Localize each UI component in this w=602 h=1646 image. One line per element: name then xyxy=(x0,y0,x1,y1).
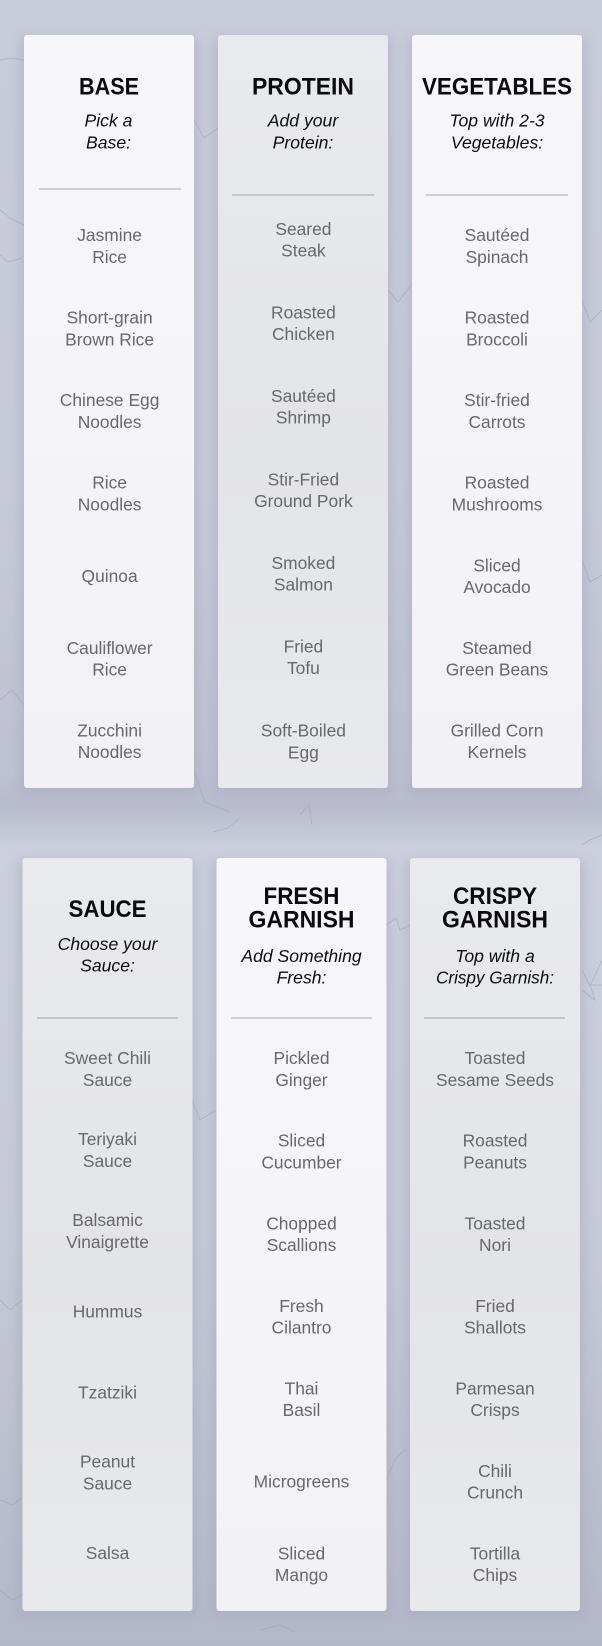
list: crispy garnish options: Peanuts xyxy=(463,1152,527,1172)
list: vegetable options: Sliced xyxy=(473,555,521,575)
list: crispy garnish options: Sesame Seeds xyxy=(436,1070,554,1090)
subtitle: add something fresh: Fresh: xyxy=(277,968,327,988)
list: base options: Rice xyxy=(92,660,127,680)
list: vegetable options: Broccoli xyxy=(466,329,528,349)
list: crispy garnish options: Crisps xyxy=(470,1400,520,1420)
subtitle: add something fresh xyxy=(240,946,362,988)
list: fresh garnish options: Pickled xyxy=(273,1048,330,1068)
list: base options: Noodles xyxy=(78,742,142,762)
panel: sauce xyxy=(22,858,192,1611)
list: protein options: Seared xyxy=(275,219,331,239)
list: base options: Chinese Egg xyxy=(60,390,159,410)
list: crispy garnish options: Shallots xyxy=(464,1317,526,1337)
list: sauce options: Vinaigrette xyxy=(66,1232,149,1252)
list: fresh garnish options: Cilantro xyxy=(272,1317,331,1337)
heading: fresh garnish: GARNISH xyxy=(248,907,354,934)
list: base options: Zucchini xyxy=(77,720,142,740)
subtitle: add your protein xyxy=(267,111,339,152)
list: vegetable options: Steamed xyxy=(462,638,532,658)
list: protein options: Steak xyxy=(281,241,326,261)
list: vegetable options: Green Beans xyxy=(446,660,549,680)
list: sauce options: Sweet Chili xyxy=(64,1048,151,1068)
list: crispy garnish options: Parmesan xyxy=(455,1378,535,1398)
list: protein options: Soft-Boiled xyxy=(261,721,346,741)
list: protein options xyxy=(254,219,353,762)
panel: vegetables xyxy=(412,35,582,788)
list: base options: Noodles xyxy=(78,494,142,514)
list: protein options: Shrimp xyxy=(276,408,331,428)
list: vegetable options: Mushrooms xyxy=(452,494,543,514)
panel: fresh garnish xyxy=(216,858,386,1611)
list: fresh garnish options: Chopped xyxy=(266,1213,337,1233)
list: sauce options: Hummus xyxy=(73,1301,143,1321)
list: crispy garnish options: Toasted xyxy=(465,1213,525,1233)
list: sauce options: Tzatziki xyxy=(78,1382,137,1402)
subtitle: pick a base xyxy=(85,111,133,152)
list: protein options: Smoked xyxy=(272,553,335,573)
subtitle: add something fresh: Add Something xyxy=(240,946,362,966)
list: vegetable options: Sautéed xyxy=(465,225,529,245)
list: base options: Cauliflower xyxy=(67,638,153,658)
list: fresh garnish options: Sliced xyxy=(278,1131,325,1151)
panel: protein xyxy=(218,35,388,788)
list: protein options: Tofu xyxy=(287,658,320,678)
list: crispy garnish options: Tortilla xyxy=(470,1543,520,1563)
list: fresh garnish options: Sliced xyxy=(278,1543,325,1563)
subtitle: top with vegetables: Vegetables: xyxy=(451,132,543,152)
subtitle: top with crispy garnish: Top with a xyxy=(455,946,535,966)
subtitle: pick a base: Base: xyxy=(86,132,131,152)
list: vegetable options: Kernels xyxy=(468,742,527,762)
list: vegetable options: Carrots xyxy=(468,412,526,432)
list: sauce options: Balsamic xyxy=(72,1210,143,1230)
list: protein options: Chicken xyxy=(272,324,335,344)
list: protein options: Egg xyxy=(288,742,319,762)
list: protein options: Fried xyxy=(284,637,323,657)
list: fresh garnish options: Mango xyxy=(275,1565,328,1585)
list: sauce options: Sauce xyxy=(83,1473,132,1493)
subtitle: choose your sauce: Sauce: xyxy=(80,956,135,976)
list: crispy garnish options: Toasted xyxy=(465,1048,525,1068)
list: protein options: Roasted xyxy=(271,302,336,322)
heading: sauce: SAUCE xyxy=(68,896,146,923)
heading: crispy garnish: CRISPY xyxy=(453,883,537,910)
list: fresh garnish options xyxy=(254,1048,350,1585)
heading: fresh garnish xyxy=(248,883,354,934)
list: vegetable options: Spinach xyxy=(466,247,528,267)
list: fresh garnish options: Thai xyxy=(285,1378,318,1398)
list: fresh garnish options: Basil xyxy=(283,1400,320,1420)
list: sauce options: Teriyaki xyxy=(78,1129,137,1149)
list: fresh garnish options: Fresh xyxy=(279,1296,324,1316)
list: crispy garnish options xyxy=(436,1048,554,1585)
list: base options: Jasmine xyxy=(77,225,142,245)
heading: protein: PROTEIN xyxy=(252,74,354,100)
subtitle: top with vegetables xyxy=(449,111,545,152)
list: crispy garnish options: Roasted xyxy=(463,1131,527,1151)
list: vegetable options: Roasted xyxy=(465,473,529,493)
heading: vegetables: VEGETABLES xyxy=(422,74,572,100)
subtitle: top with crispy garnish xyxy=(436,946,554,988)
heading: fresh garnish: FRESH xyxy=(264,883,340,910)
subtitle: choose your sauce: Choose your xyxy=(58,934,159,954)
list: sauce options: Peanut xyxy=(80,1452,135,1472)
list: crispy garnish options: Crunch xyxy=(467,1483,523,1503)
subtitle: pick a base: Pick a xyxy=(85,111,133,131)
list: base options xyxy=(60,225,159,762)
heading: crispy garnish: GARNISH xyxy=(442,907,548,934)
list: crispy garnish options: Chips xyxy=(473,1565,518,1585)
list: vegetable options: Grilled Corn xyxy=(451,720,543,740)
list: fresh garnish options: Cucumber xyxy=(261,1152,342,1172)
list: sauce options: Sauce xyxy=(83,1151,132,1171)
list: crispy garnish options: Nori xyxy=(479,1235,511,1255)
list: crispy garnish options: Chili xyxy=(478,1461,512,1481)
list: base options: Noodles xyxy=(78,412,142,432)
heading: base: BASE xyxy=(79,74,139,100)
subtitle: add your protein: Protein: xyxy=(273,132,333,152)
list: crispy garnish options: Fried xyxy=(475,1296,515,1316)
list: sauce options: Salsa xyxy=(86,1543,130,1563)
list: protein options: Stir-Fried xyxy=(268,469,339,489)
panel: crispy garnish xyxy=(410,858,580,1611)
list: base options: Quinoa xyxy=(82,566,138,586)
subtitle: add your protein: Add your xyxy=(267,111,339,131)
list: base options: Short-grain xyxy=(67,308,153,328)
heading: crispy garnish xyxy=(442,883,548,934)
subtitle: top with crispy garnish: Crispy Garnish: xyxy=(436,968,554,988)
list: fresh garnish options: Scallions xyxy=(267,1235,337,1255)
list: vegetable options: Stir-fried xyxy=(464,390,530,410)
list: sauce options: Sauce xyxy=(83,1070,132,1090)
list: vegetable options: Roasted xyxy=(465,308,529,328)
list: base options: Brown Rice xyxy=(65,329,154,349)
list: vegetable options xyxy=(446,225,549,762)
subtitle: top with vegetables: Top with 2-3 xyxy=(449,111,545,131)
list: vegetable options: Avocado xyxy=(463,577,531,597)
list: protein options: Sautéed xyxy=(271,386,336,406)
list: fresh garnish options: Ginger xyxy=(275,1070,328,1090)
list: base options: Rice xyxy=(92,247,127,267)
list: fresh garnish options: Microgreens xyxy=(254,1472,350,1492)
panel: base xyxy=(24,35,194,788)
list: base options: Rice xyxy=(92,473,127,493)
subtitle: choose your sauce xyxy=(58,934,159,976)
list: protein options: Salmon xyxy=(274,575,333,595)
list: protein options: Ground Pork xyxy=(254,491,353,511)
list: sauce options xyxy=(64,1048,151,1563)
